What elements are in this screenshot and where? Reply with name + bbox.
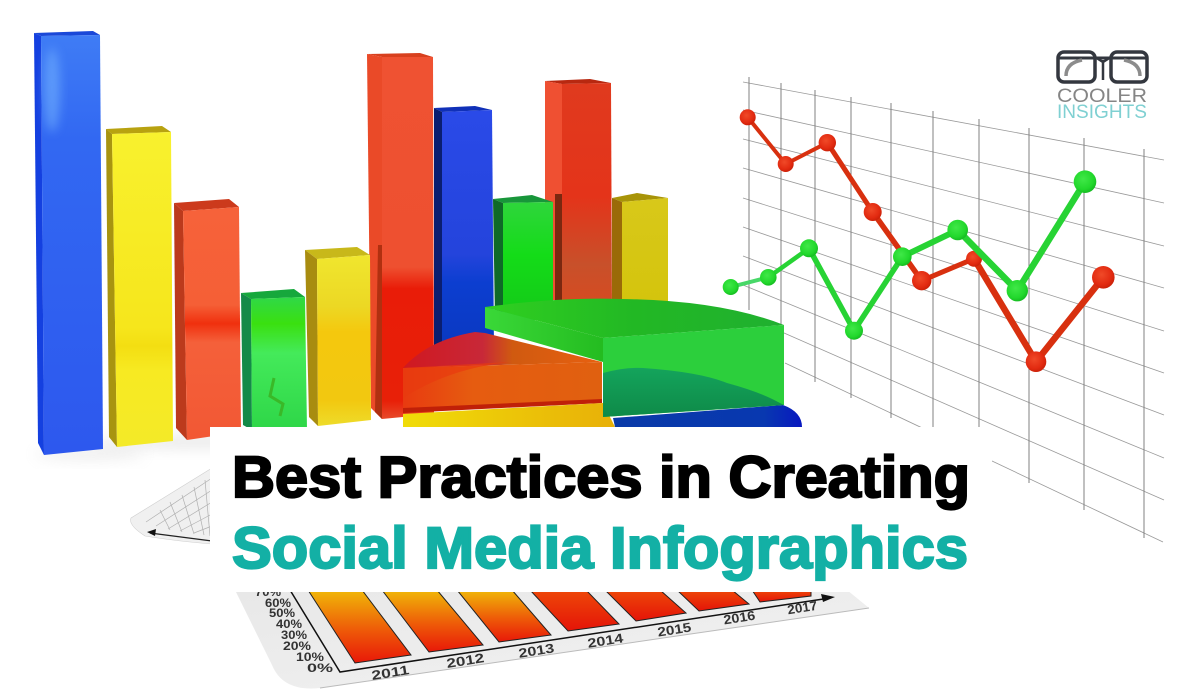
bar: yellow front <box>305 247 371 426</box>
3D pie chart <box>403 299 802 427</box>
3D bar chart <box>34 31 668 455</box>
year labels: 2012 <box>445 650 485 671</box>
line chart grid <box>743 77 1164 542</box>
bar: red front <box>174 199 241 440</box>
bar: tall blue <box>34 31 103 455</box>
title <box>232 445 970 581</box>
percent labels: 10% <box>296 650 324 664</box>
logo: Cooler Insights <box>1057 52 1147 123</box>
bar: green back <box>493 195 553 320</box>
green data line <box>723 170 1096 340</box>
bar: blue back <box>434 106 494 350</box>
bar: red back <box>545 79 612 310</box>
red data line <box>740 109 1115 372</box>
percent labels: 50% <box>269 606 295 620</box>
year labels: 2017 <box>786 598 818 617</box>
logo text: INSIGHTS: INSIGHTS <box>1057 101 1147 123</box>
floor shadow <box>35 436 310 459</box>
percent labels: 60% <box>265 596 291 610</box>
slice: yellow <box>403 403 615 427</box>
left paper chart sheet <box>131 468 212 544</box>
bar: yellow back right <box>612 193 668 310</box>
bottom paper bar chart <box>235 585 869 689</box>
slice: red orange <box>403 332 602 413</box>
slice: green <box>485 299 784 417</box>
percent labels: 70% <box>255 585 281 599</box>
title line 1: Best Practices in Creating <box>232 445 970 510</box>
slice: blue <box>613 405 802 427</box>
paper bars <box>308 590 811 663</box>
title banner background <box>210 427 992 592</box>
percent labels: 40% <box>276 617 302 631</box>
year labels: 2013 <box>517 640 555 661</box>
percent labels <box>255 585 333 675</box>
title line 2: Social Media Infographics <box>232 516 968 581</box>
percent labels: 20% <box>283 639 311 653</box>
year labels: 2011 <box>370 662 410 683</box>
logo text: COOLER: COOLER <box>1057 85 1147 107</box>
percent labels: 0% <box>307 661 333 675</box>
percent labels: 30% <box>281 628 307 642</box>
paper axes <box>290 590 835 672</box>
year labels: 2014 <box>586 630 625 651</box>
year labels: 2015 <box>656 619 692 640</box>
year labels: 2016 <box>722 608 756 627</box>
bar: green front <box>241 289 307 430</box>
bar: yellow left <box>106 126 173 447</box>
icon: glasses <box>1058 52 1147 82</box>
year labels <box>370 598 818 683</box>
bar: tall red <box>367 53 434 419</box>
